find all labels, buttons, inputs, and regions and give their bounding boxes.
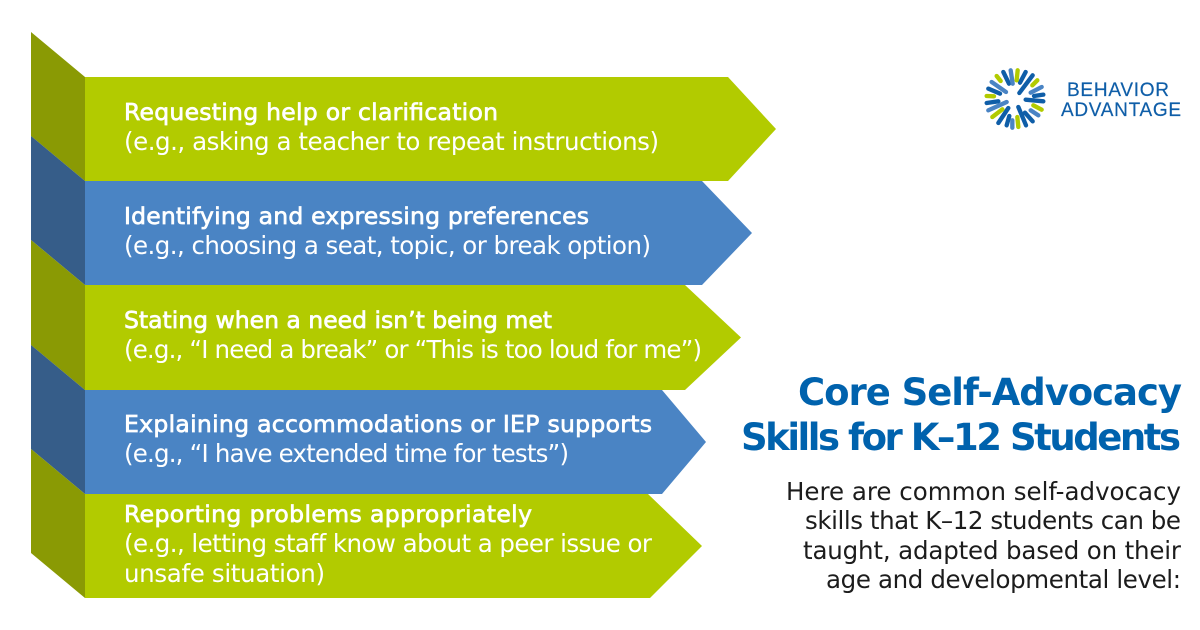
skill 2 text: Identifying and expressing preferences: [124, 202, 589, 230]
arrow band 1: [85, 77, 776, 181]
title: [741, 371, 1182, 459]
title: Core Self-Advocacy: [798, 371, 1182, 414]
logo wordmark: [1061, 80, 1181, 121]
intro text block: [786, 477, 1182, 594]
side face: band 2: [31, 136, 85, 285]
side face: band 3: [31, 240, 85, 390]
title: Skills for K–12 Students: [741, 416, 1181, 459]
skill 5 text: [124, 500, 653, 588]
arrow band 5: [85, 494, 702, 598]
skill 3 text: [124, 306, 702, 364]
stair panel: five skills: [31, 32, 776, 598]
skill 2 text: [124, 202, 651, 260]
intro text block: Here are common self-advocacy: [786, 477, 1181, 506]
intro text block: taught, adapted based on their: [803, 536, 1182, 565]
side face: band 4: [31, 345, 85, 494]
skill 3 text: Stating when a need isn’t being met: [124, 306, 552, 334]
skill 4 text: Explaining accommodations or IEP supports: [124, 410, 652, 438]
arrow band 3: [85, 285, 741, 390]
logo wordmark: ADVANTAGE: [1061, 100, 1181, 121]
arrow band 2: [85, 181, 752, 285]
skill 2 text: (e.g., choosing a seat, topic, or break option): [124, 231, 651, 260]
skill 4 text: [124, 410, 652, 468]
arrow band 4: [85, 390, 706, 494]
skill 5 text: Reporting problems appropriately: [124, 500, 532, 528]
side face: band 1: [31, 32, 85, 181]
intro text block: age and developmental level:: [826, 565, 1181, 594]
skill 5 text: unsafe situation): [124, 559, 325, 588]
skill 1 text: Requesting help or clarification: [124, 98, 498, 126]
icon: radial burst: [987, 70, 1043, 128]
intro text block: skills that K–12 students can be: [805, 506, 1181, 535]
skill 1 text: [124, 98, 659, 156]
logo: Behavior Advantage: [987, 70, 1181, 128]
side face: band 5: [31, 449, 85, 598]
logo wordmark: BEHAVIOR: [1067, 80, 1169, 101]
skill 3 text: (e.g., “I need a break” or “This is too loud for me”): [124, 335, 702, 364]
skill 1 text: (e.g., asking a teacher to repeat instructions): [124, 127, 659, 156]
skill 4 text: (e.g., “I have extended time for tests”): [124, 439, 569, 468]
skill 5 text: (e.g., letting staff know about a peer issue or: [124, 529, 653, 558]
